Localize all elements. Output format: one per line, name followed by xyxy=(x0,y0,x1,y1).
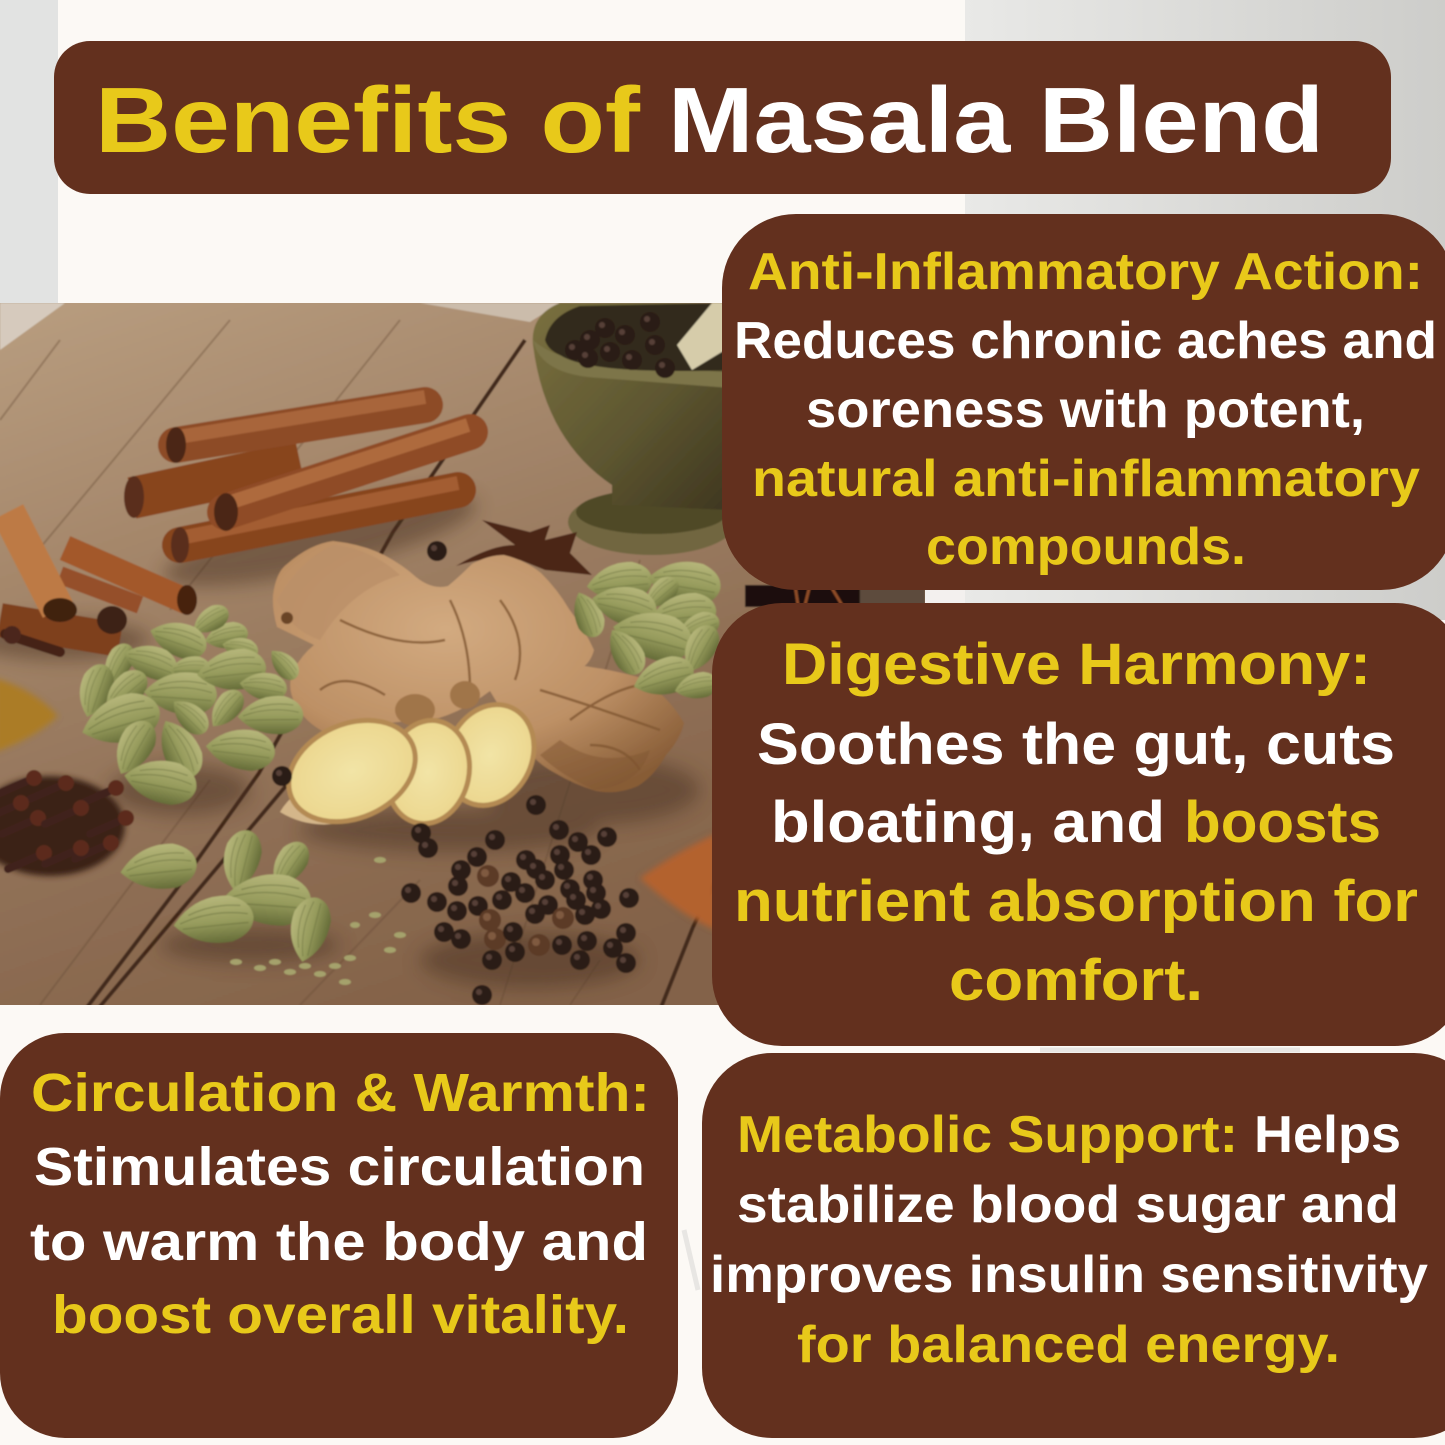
title text: Masala Blend xyxy=(668,68,1324,172)
panel text xyxy=(734,243,1437,576)
panel: metabolic support xyxy=(702,1053,1445,1438)
panel text: improves insulin sensitivity xyxy=(710,1246,1428,1304)
cloves xyxy=(0,770,134,876)
panel text: Soothes the gut, cuts xyxy=(757,712,1395,777)
title text xyxy=(95,68,1324,172)
panel text: comfort. xyxy=(949,948,1203,1013)
photo: masala spices on a wooden table xyxy=(0,295,935,1015)
panel text: boosts xyxy=(1184,790,1381,855)
cinnamon sticks xyxy=(0,397,470,652)
title text: Benefits of xyxy=(95,68,641,172)
panel text: nutrient absorption for xyxy=(734,869,1418,934)
panel text: Helps xyxy=(1254,1106,1401,1164)
panel text: Circulation & Warmth: xyxy=(31,1063,650,1123)
panel text: Digestive Harmony: xyxy=(782,632,1371,697)
panel: anti-inflammatory action xyxy=(722,214,1445,590)
panel: circulation and warmth xyxy=(0,1033,678,1438)
cardamom pods xyxy=(71,555,726,966)
black peppercorns xyxy=(272,541,639,1005)
panel text xyxy=(30,1063,650,1345)
panel text: Metabolic Support: xyxy=(737,1106,1238,1164)
fennel seeds xyxy=(230,857,406,985)
whole ginger root xyxy=(273,541,684,792)
spice powders xyxy=(0,678,716,930)
panel text: natural anti-inflammatory xyxy=(752,450,1420,508)
soft shadows on the table xyxy=(0,475,700,988)
mortar and pestle xyxy=(533,303,736,555)
panel text: to warm the body and xyxy=(30,1212,648,1272)
panel text: Stimulates circulation xyxy=(34,1137,645,1197)
panel text: stabilize blood sugar and xyxy=(737,1176,1399,1234)
panel text: boost overall vitality. xyxy=(52,1285,629,1345)
panel text xyxy=(734,632,1418,1013)
star anise xyxy=(456,520,592,575)
panel text: Anti-Inflammatory Action: xyxy=(748,243,1423,301)
panel text: Reduces chronic aches and xyxy=(734,312,1437,370)
star anise behind panels xyxy=(745,585,925,607)
panel text: for balanced energy. xyxy=(797,1316,1340,1374)
panel text: compounds. xyxy=(926,518,1246,576)
panel text: soreness with potent, xyxy=(806,381,1365,439)
title banner xyxy=(54,41,1391,194)
panel: digestive harmony xyxy=(712,603,1445,1046)
wooden table xyxy=(0,295,935,1015)
panel text xyxy=(710,1106,1428,1374)
ginger slices xyxy=(280,702,536,827)
panel text: bloating, and xyxy=(771,790,1165,855)
